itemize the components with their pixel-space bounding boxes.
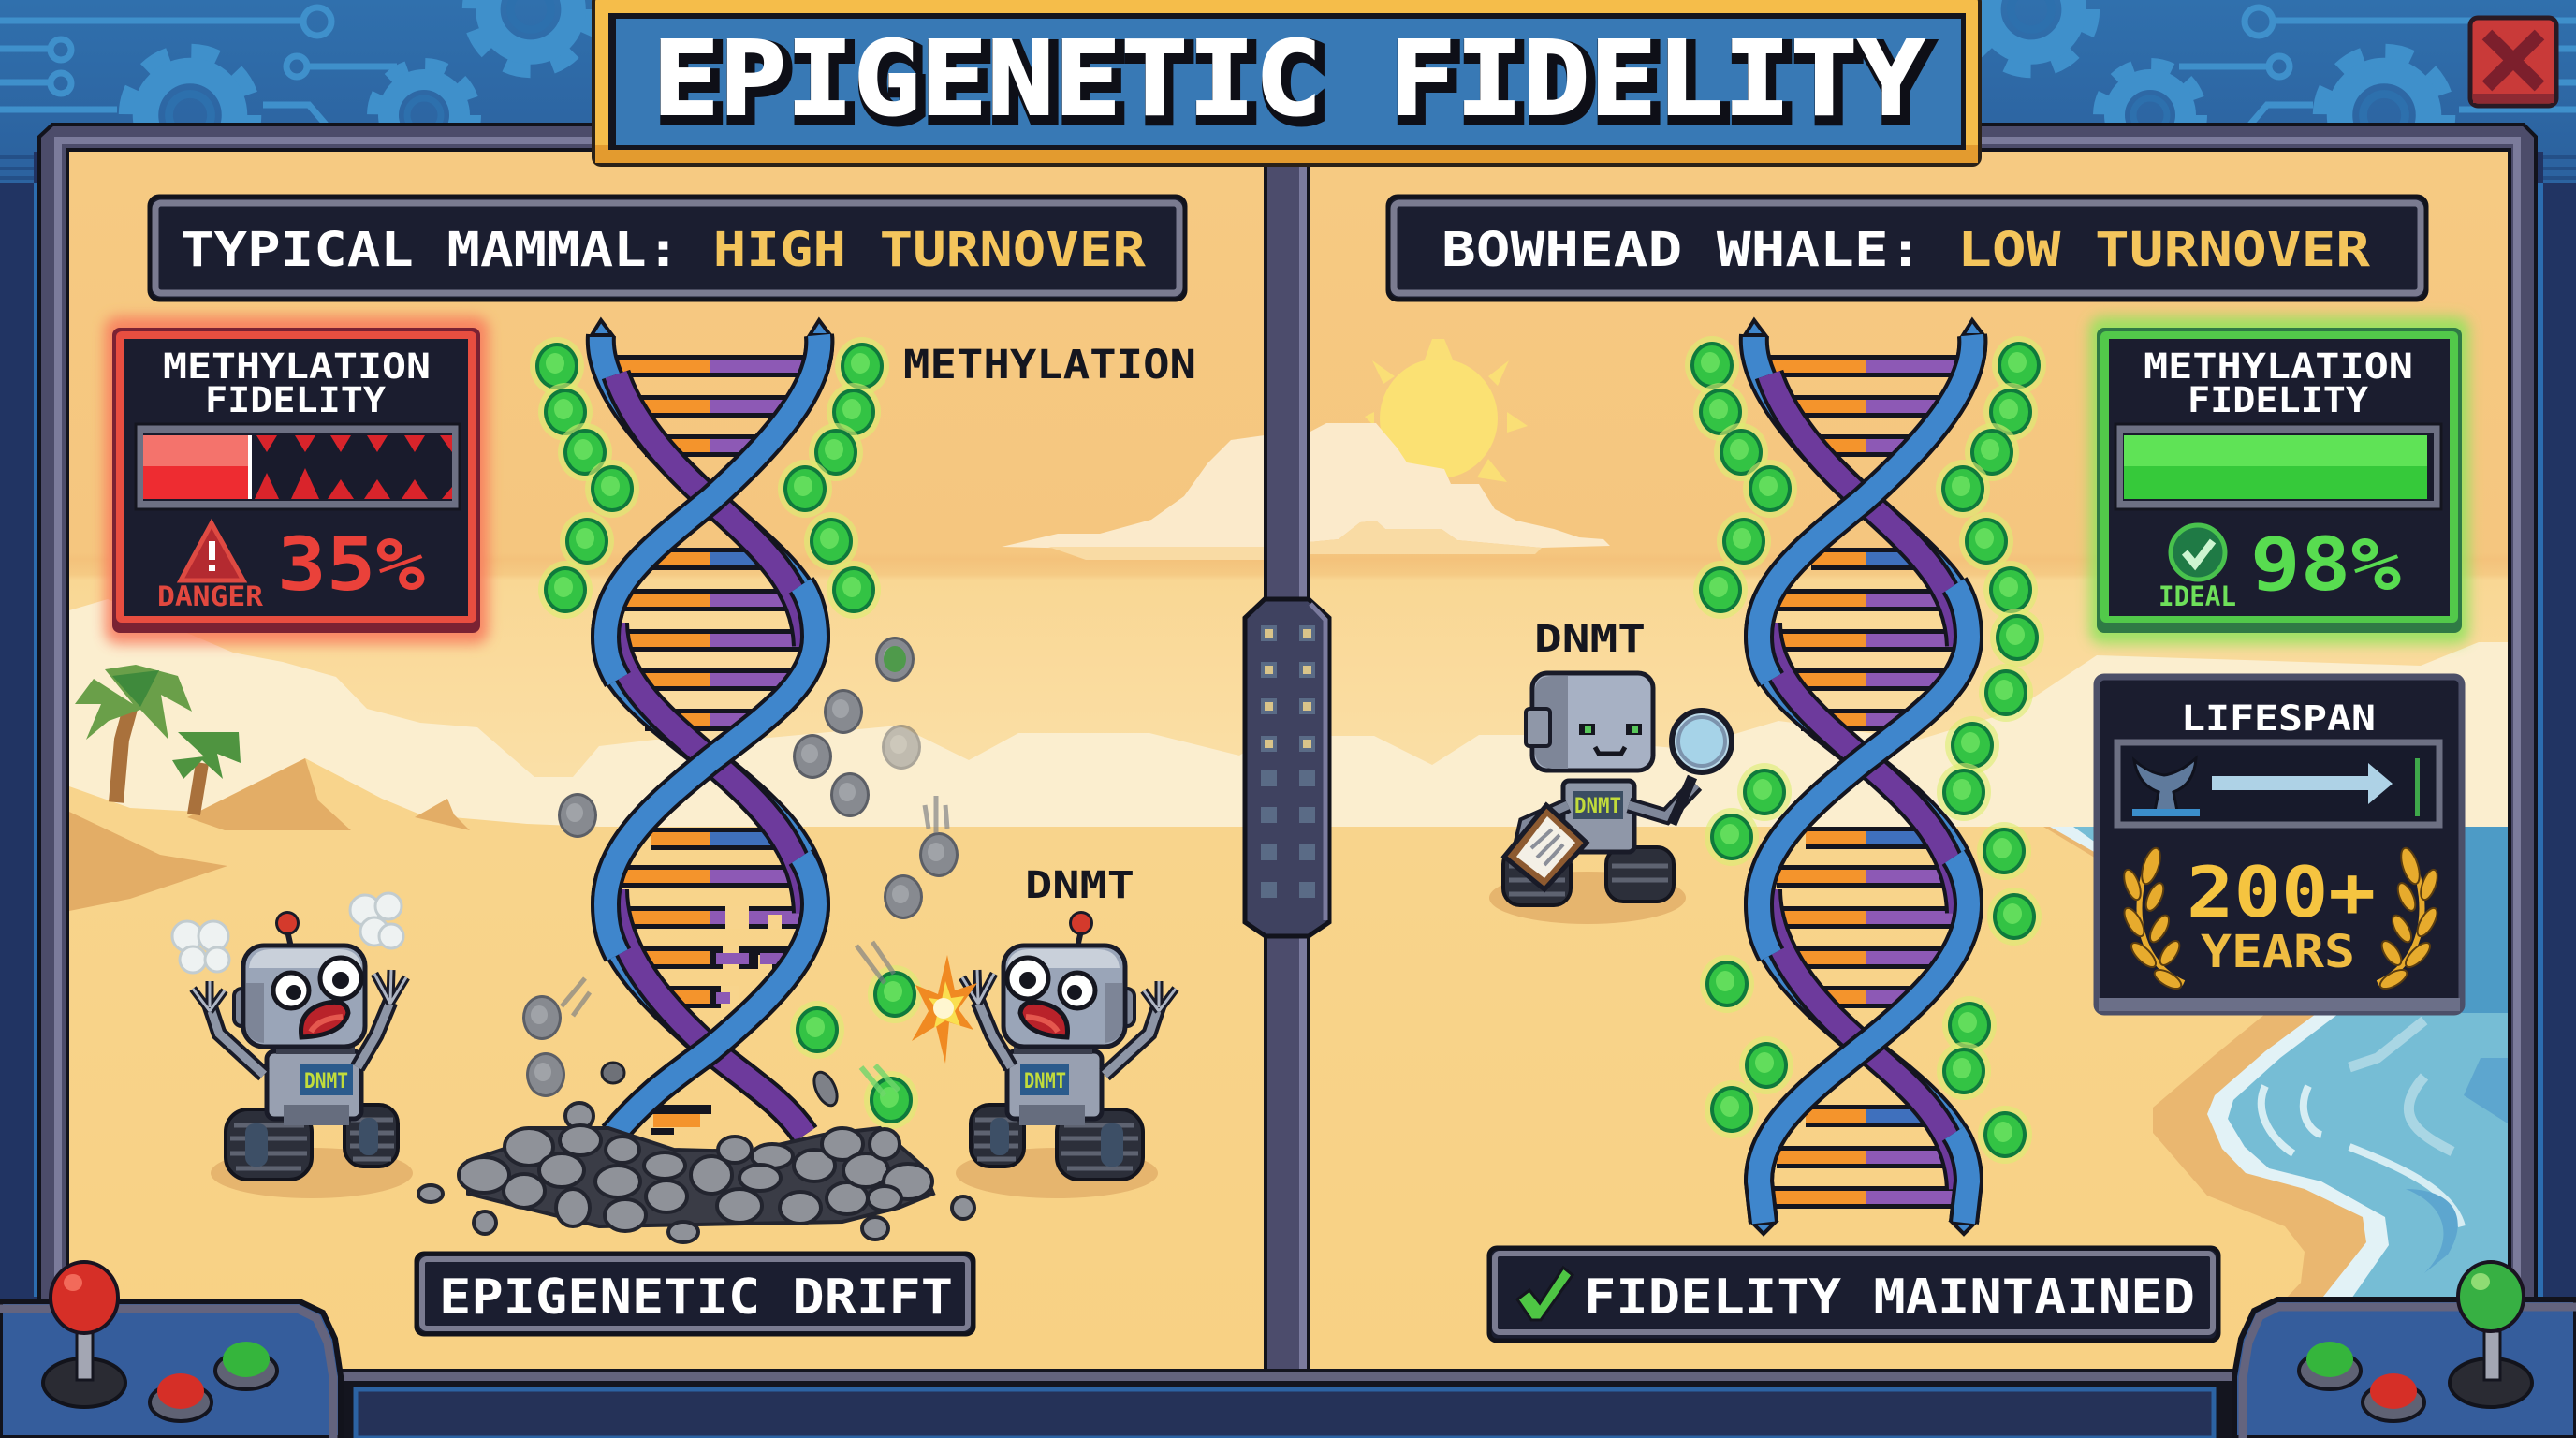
text: 35 percent: 35% — [277, 523, 425, 608]
icon: clipboard — [1504, 805, 1587, 889]
strand: purple — [1767, 374, 1960, 1189]
icons: header gears — [129, 0, 2445, 176]
title banner: EPIGENETIC FIDELITY — [652, 19, 1925, 139]
icon: whale tail — [2132, 758, 2200, 816]
scenery: dunes — [69, 758, 599, 911]
text: DNMT badge: DNMT — [304, 1070, 348, 1093]
label: epigenetic drift: EPIGENETIC DRIFT — [439, 1269, 953, 1326]
scenery: sun and clouds on right — [1309, 339, 1610, 554]
methylation marks: right — [1685, 336, 2046, 1164]
strand: blue underlayer — [1745, 320, 1983, 1234]
text: meter title: METHYLATION — [2144, 346, 2413, 387]
console: left controls — [0, 1262, 341, 1438]
label: DNMT right panel: DNMT — [1534, 618, 1646, 661]
strand: blue overlayer — [606, 335, 819, 1135]
timeline bar — [2117, 742, 2439, 825]
panel: ideal fidelity meter — [2089, 316, 2469, 644]
text: DNMT badge — [300, 1064, 353, 1095]
robot: panicked DNMT right — [912, 864, 1176, 1198]
icon: green check — [1517, 1268, 1573, 1320]
button: close X — [2470, 18, 2556, 106]
strand: purple — [614, 374, 807, 1135]
robot: calm DNMT inspector — [1489, 673, 1732, 924]
heading: bowhead whale — [1388, 197, 2426, 300]
icon: red joystick — [43, 1262, 125, 1407]
text: danger: DANGER — [157, 580, 264, 612]
falling methyl groups — [522, 637, 959, 1129]
chart: right DNA helix, intact — [1745, 320, 1983, 1234]
text: meter title: FIDELITY — [205, 380, 387, 420]
text: DNMT badge: DNMT — [1024, 1070, 1066, 1093]
scenery: cream hills left — [69, 599, 1265, 827]
rungs: base pairs — [1764, 355, 1966, 1209]
bar: 35 percent — [136, 424, 460, 509]
text: meter title — [2144, 346, 2413, 420]
bar: 98 percent — [2115, 424, 2441, 509]
text: DNMT badge — [1020, 1064, 1069, 1095]
icon: check badge — [2171, 525, 2225, 580]
methylation marks: left — [530, 337, 889, 619]
icon: gold laurels — [2120, 846, 2441, 992]
text: DNMT badge: DNMT — [1574, 795, 1621, 818]
label: fidelity maintained — [1489, 1248, 2218, 1341]
title banner: EPIGENETIC FIDELITY — [657, 24, 1929, 144]
text: years: YEARS — [2201, 926, 2355, 978]
rungs: base pairs — [610, 355, 812, 1135]
arrow: lifespan — [2212, 763, 2393, 804]
icon: warning triangle — [181, 523, 243, 580]
chart: left DNA helix, eroding — [592, 320, 830, 1135]
label: methylation: METHYLATION — [903, 342, 1196, 389]
robot: panicked DNMT left — [172, 893, 413, 1198]
heading: bowhead whale: BOWHEAD WHALE: LOW TURNOVER — [1442, 223, 2370, 278]
text: meter title: METHYLATION — [163, 346, 431, 387]
text: 200 plus: 200+ — [2187, 851, 2376, 933]
scenery: cream hills right — [1309, 642, 2508, 827]
label: epigenetic drift — [417, 1254, 973, 1334]
panel: lifespan — [2097, 677, 2462, 1012]
heading: typical mammal — [150, 197, 1185, 300]
text: meter title — [163, 346, 431, 420]
icon: green joystick — [2450, 1262, 2532, 1407]
heading: typical mammal: TYPICAL MAMMAL: HIGH TURNOVER — [181, 223, 1146, 278]
icon: spark — [912, 955, 977, 1064]
title banner — [593, 0, 1980, 165]
icon: magnifier — [1672, 711, 1732, 824]
scenery: left clouds — [1002, 435, 1265, 560]
label: DNMT: DNMT — [1025, 864, 1134, 907]
text: 98 percent: 98% — [2250, 523, 2401, 608]
scenery: ocean and shoreline — [2043, 827, 2508, 1301]
text: meter title: FIDELITY — [2188, 380, 2369, 420]
icon: arcade buttons — [2299, 1342, 2424, 1421]
icon: palm trees — [75, 665, 241, 814]
icon: arcade buttons — [150, 1342, 277, 1421]
strand: blue overlayer — [1759, 335, 1972, 1223]
bottom console strip — [300, 1369, 2265, 1438]
text: lifespan: LIFESPAN — [2181, 698, 2376, 739]
label: fidelity maintained: FIDELITY MAINTAINED — [1584, 1269, 2195, 1326]
console: right controls — [2234, 1262, 2576, 1438]
divider: center spine — [1245, 152, 1329, 1371]
text: ideal: IDEAL — [2159, 580, 2236, 612]
strand: blue underlayer — [592, 320, 830, 1135]
rubble pile — [418, 1103, 974, 1242]
panel: danger fidelity meter — [105, 316, 489, 644]
icon: steam — [172, 893, 403, 973]
